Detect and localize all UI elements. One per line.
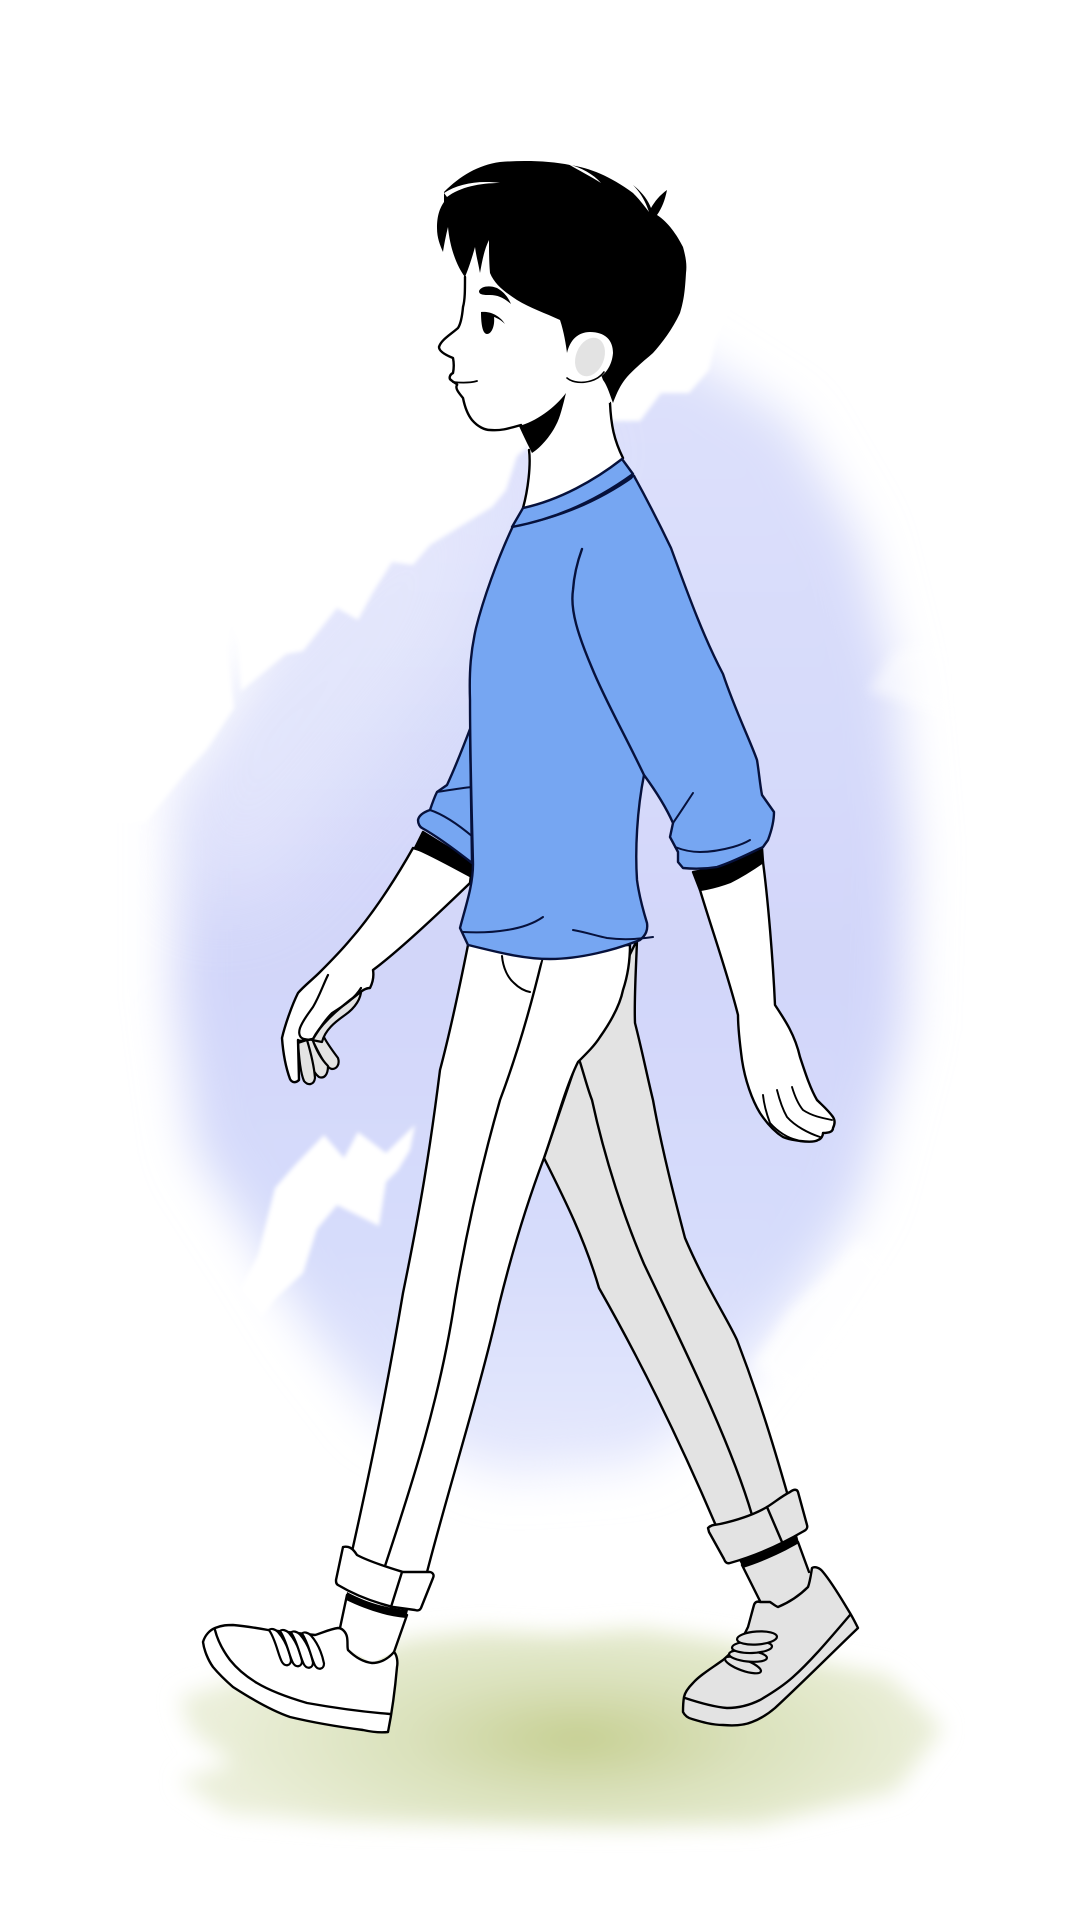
shirt body [460, 476, 690, 959]
hair [437, 161, 686, 403]
front trouser cuff [336, 1547, 434, 1610]
black lining [415, 832, 473, 877]
sock band [346, 1592, 408, 1618]
sock band [739, 1535, 799, 1568]
rear arm and hand [700, 862, 834, 1142]
shoe laces [723, 1630, 777, 1677]
rear leg, grey trousers [544, 940, 792, 1540]
hair highlights [444, 164, 601, 197]
head [437, 161, 686, 453]
figure: walking boy [203, 161, 858, 1732]
neck shadow [519, 393, 566, 453]
front sleeve [415, 729, 473, 877]
front leg, white trousers [351, 945, 630, 1580]
rear shoe [683, 1567, 858, 1725]
face outline [439, 277, 521, 430]
pocket [502, 956, 542, 992]
neck [512, 400, 633, 530]
front ankle [340, 1592, 408, 1663]
mouth [453, 381, 477, 383]
blue watercolor wash [0, 0, 1080, 1475]
ear shading [570, 333, 610, 381]
back fingers [298, 988, 361, 1084]
front arm and hand [282, 848, 472, 1084]
shirt collar [512, 459, 633, 527]
green ground shadow [179, 1628, 943, 1827]
eye [481, 312, 505, 334]
near sleeve [572, 476, 774, 890]
front shoe [203, 1625, 397, 1732]
rear ankle [739, 1535, 809, 1612]
eyebrow [479, 286, 511, 304]
rear trouser cuff [708, 1490, 807, 1563]
shoe laces [269, 1629, 324, 1669]
face [439, 240, 610, 430]
ear [567, 332, 613, 383]
